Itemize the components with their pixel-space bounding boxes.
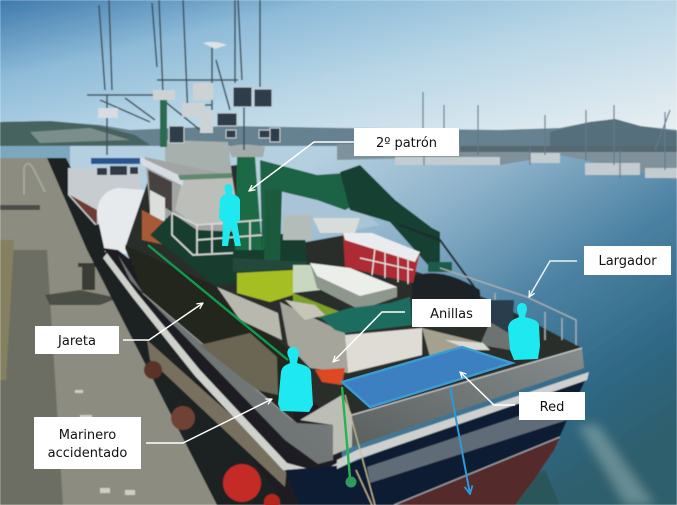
sky	[0, 0, 677, 170]
label: Largador	[584, 246, 671, 275]
green line: purse line along side	[148, 245, 288, 360]
clutter above wheelhouse	[165, 140, 232, 176]
wheelhouse	[145, 157, 240, 240]
balcony rail	[172, 213, 262, 255]
label: 2º patrón: 2º patrón	[376, 136, 437, 151]
label: Jareta	[35, 326, 119, 354]
blue arrow: net going overboard	[450, 387, 470, 494]
winch area	[412, 273, 480, 300]
label: Marinero accidentado: accidentado	[48, 446, 127, 461]
white wall	[345, 328, 422, 373]
water glimpse behind crane	[283, 190, 380, 232]
mast column, green	[235, 157, 262, 250]
net area	[342, 347, 512, 407]
yellow-green boxes	[237, 270, 293, 302]
bulkhead gray wall	[280, 302, 348, 373]
stern rail	[440, 268, 576, 345]
arrow: jareta	[123, 303, 203, 340]
white box	[310, 263, 397, 310]
figure: 2º patrón	[219, 184, 241, 246]
green line: line over stern with weight	[342, 387, 356, 488]
mast lights and antennas	[152, 0, 280, 150]
white lifeboat	[97, 188, 165, 255]
arrow: red	[460, 372, 515, 405]
stern hull	[285, 372, 589, 505]
boat base: dark body of the deck	[125, 165, 582, 447]
dock gap shadow	[47, 158, 350, 505]
red structure	[343, 233, 420, 283]
bottom water reflection	[480, 470, 560, 505]
deck at stern	[300, 395, 352, 455]
arrow: anillas	[333, 312, 405, 362]
label: Red	[519, 392, 585, 420]
ropes at stern	[345, 395, 375, 505]
crane platform	[283, 215, 312, 240]
marina boats	[337, 92, 677, 180]
label: Anillas: Anillas	[430, 307, 473, 322]
hull side and rail	[103, 248, 345, 505]
arrow: marinero accidentado	[146, 399, 272, 443]
quay rail	[24, 163, 45, 195]
bollard	[78, 263, 98, 290]
light wall along line	[217, 287, 282, 340]
label: Marinero accidentado: Marinero	[59, 428, 116, 443]
arrow: largador	[529, 261, 577, 297]
quay stains	[50, 340, 135, 495]
label: Largador: Largador	[598, 254, 657, 269]
working deck	[125, 245, 300, 420]
harbour water	[0, 146, 677, 505]
quay	[0, 158, 217, 505]
label: 2º patrón	[354, 128, 459, 156]
fenders	[144, 361, 162, 379]
red buoy	[223, 464, 261, 502]
stern bulwark	[352, 348, 584, 447]
background boat	[68, 0, 155, 225]
red floats and rings	[315, 368, 345, 385]
green lower house	[150, 213, 307, 287]
green net	[320, 297, 412, 333]
label: Anillas	[412, 299, 491, 327]
figure: largador	[508, 303, 540, 360]
figure: marinero accidentado	[278, 347, 313, 412]
label: Marinero accidentado	[34, 417, 141, 469]
sun reflection on water	[578, 425, 655, 505]
distant hills	[0, 119, 677, 160]
arrow: 2º patrón	[249, 142, 354, 191]
label: Red: Red	[540, 400, 564, 415]
label: Jareta: Jareta	[57, 334, 96, 349]
crane arm	[260, 160, 385, 250]
